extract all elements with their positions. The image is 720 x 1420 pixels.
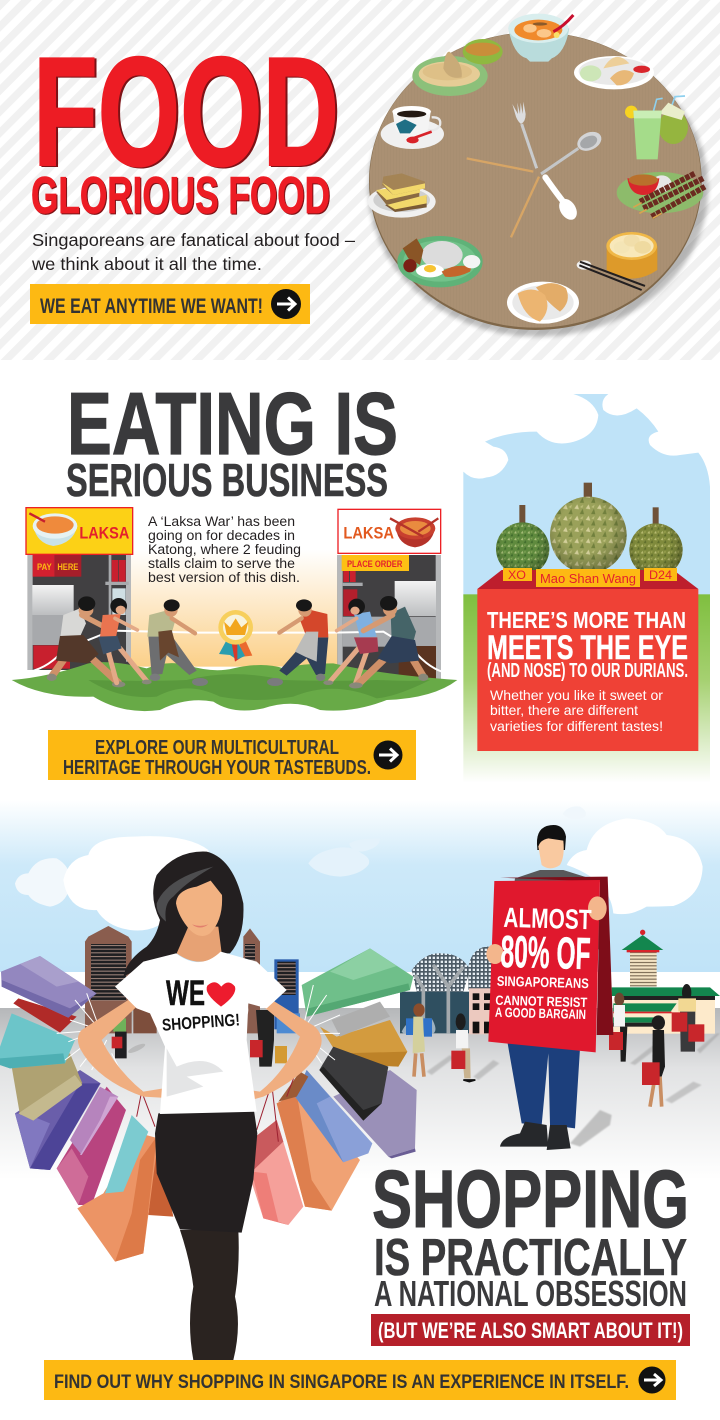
shopping sky (0, 800, 720, 972)
pay here sign: PAY (37, 562, 52, 572)
brown tower (85, 926, 260, 1033)
puller: woman in blue (323, 599, 378, 688)
neck (177, 927, 222, 962)
shopper in cream dress (413, 1003, 425, 1077)
food clock (368, 14, 708, 337)
right laksa sign (338, 509, 441, 553)
clock hand: chopstick one (467, 158, 533, 172)
shopping ground (0, 1008, 720, 1180)
left laksa sign (26, 508, 133, 554)
durian body text: Whether you like it sweet or (490, 687, 663, 703)
heading: serious business: SERIOUS BUSINESS (66, 454, 388, 506)
board text: 80% OF (500, 926, 591, 979)
intro text (31, 230, 355, 274)
bag: orange left (77, 1133, 158, 1262)
bag: purple (15, 1070, 101, 1170)
skirt (155, 1111, 257, 1233)
clock hand: ceramic spoon (545, 177, 581, 223)
red box (477, 589, 698, 751)
durian heading (487, 607, 688, 682)
shopper with dark trousers (609, 993, 627, 1062)
durian sky with cloud cut-outs (463, 394, 710, 597)
shirt text: shopping: SHOPPING! (161, 1010, 240, 1035)
puller: man in grey apron (267, 599, 328, 686)
call to action: shopping experience: FIND OUT WHY SHOPPING IN SINGAPORE IS AN EXPERIENCE IN ITSELF. (54, 1372, 629, 1393)
man shadow (570, 1110, 612, 1147)
red box top (477, 570, 698, 589)
call to action: eat anytime: WE EAT ANYTIME WE WANT! (40, 295, 263, 318)
arm right (213, 997, 322, 1107)
puller: man in teal singlet (349, 596, 428, 688)
lips (192, 924, 208, 927)
blue tower (274, 959, 300, 1033)
call to action: multicultural heritage (48, 730, 416, 780)
man with sandwich board (486, 825, 613, 1150)
heading: eating is: EATING IS (67, 374, 398, 473)
bag: dark orange tip (278, 1072, 308, 1102)
jeans (507, 1042, 580, 1128)
laksa war text: best version of this dish. (148, 570, 300, 585)
food: plate with dumplings (574, 56, 654, 89)
puller: man in white singlet (47, 596, 125, 687)
board text: A GOOD BARGAIN (495, 1005, 586, 1022)
shopper in black suit (250, 1010, 287, 1067)
skyline left (85, 926, 300, 1067)
hand right (588, 896, 607, 920)
shirt print: we love shopping (152, 985, 248, 1035)
bag strings (57, 985, 340, 1080)
shirt (115, 952, 287, 1114)
title: food: FOOD (33, 25, 339, 198)
shoe right (547, 1125, 571, 1150)
durian body text (490, 687, 663, 734)
bag: orange behind skirt (148, 1133, 173, 1217)
hair back (123, 852, 243, 977)
bag: gold (320, 1020, 407, 1067)
durian labels: XO (508, 568, 526, 582)
intro text: we think about it all the time. (31, 254, 262, 274)
food: roti prata (412, 39, 503, 96)
bag: grey (332, 1002, 390, 1037)
clock hand: chopstick two (511, 177, 539, 237)
laksa war text: stalls claim to serve the (148, 556, 295, 571)
grass gradient (463, 594, 710, 783)
pay here sign: HERE (57, 562, 78, 572)
grass ground (12, 662, 457, 711)
call to action: multicultural heritage: EXPLORE OUR MULTICULTURAL (95, 737, 339, 759)
food: laksa bowl (508, 14, 573, 62)
face (176, 881, 222, 936)
face (538, 838, 564, 868)
clock hand: fork (512, 102, 537, 168)
laksa war text: A ‘Laksa War’ has been (148, 514, 295, 529)
back board (500, 877, 613, 1035)
skyline right (400, 930, 720, 1147)
shopper in black dress (642, 1015, 665, 1107)
hand left (486, 944, 504, 964)
board text: SINGAPOREANS (497, 973, 589, 991)
tug of war rope (30, 631, 448, 673)
shoes (500, 1122, 548, 1147)
shopper in green (112, 1018, 146, 1058)
food: curry puffs (507, 282, 579, 324)
clock face (370, 32, 701, 328)
durian labels: Mao Shan Wang (540, 571, 636, 586)
chinatown building (612, 930, 720, 1034)
food: satay plate (617, 172, 705, 218)
hair highlight (157, 867, 213, 922)
heart (207, 982, 235, 1007)
bag: teal tall (105, 1115, 148, 1193)
pay here sign (33, 555, 81, 577)
shopper in white top (451, 1013, 475, 1082)
title: glorious food (31, 167, 331, 226)
durian XO (496, 505, 549, 576)
shopping bags (0, 948, 417, 1262)
shopper in yellow top (672, 984, 704, 1052)
left laksa sign: LAKSA (79, 523, 129, 542)
title: food (33, 25, 341, 199)
board text: CANNOT RESIST (495, 993, 588, 1010)
shirt text: we: WE (166, 974, 205, 1013)
handle strings (103, 1057, 297, 1142)
food: kopi cup (381, 106, 444, 149)
food: kaya toast (368, 173, 436, 218)
bag: black (319, 1047, 388, 1121)
horizon band (0, 972, 720, 1008)
call to action: shopping experience (44, 1360, 676, 1400)
food: nasi lemak (397, 236, 483, 287)
laksa war text (148, 514, 301, 585)
durian labels (503, 568, 677, 587)
title: food: FOOD (35, 26, 341, 199)
bag: green box (302, 948, 413, 1017)
clock hand: spoon (541, 128, 604, 174)
food: dim sum basket (577, 232, 657, 290)
call to action: multicultural heritage: HERITAGE THROUGH YOUR TASTEBUDS. (63, 757, 371, 779)
right clouds (563, 806, 703, 914)
board text: ALMOST (503, 902, 592, 935)
arm left (78, 997, 188, 1098)
sunset glow (128, 550, 342, 667)
durian panel (463, 394, 710, 783)
place order sign: PLACE ORDER (347, 559, 403, 569)
durian Mao Shan Wang (550, 483, 627, 573)
woman with shopping bags (78, 852, 322, 1360)
legs (180, 1230, 239, 1360)
supertrees (400, 953, 470, 1037)
call to action: eat anytime (30, 284, 310, 324)
title: glorious food: GLORIOUS FOOD (31, 167, 330, 225)
laksa war scene (12, 508, 457, 711)
title: glorious food: GLORIOUS FOOD (32, 168, 331, 226)
puller: woman in orange (98, 598, 152, 684)
striped header background (0, 0, 720, 360)
bag: khaki (12, 1053, 82, 1121)
ground shadow shoppers (427, 1033, 720, 1103)
board text (495, 902, 592, 1022)
right stall (337, 555, 441, 680)
bag: orange right (277, 1093, 360, 1211)
durian body text: bitter, there are different (490, 702, 638, 718)
bag: light purple (70, 1087, 118, 1155)
sweater (507, 870, 610, 952)
laksa war text: going on for decades in (148, 528, 295, 543)
bag: dark red (13, 998, 77, 1033)
bag: blue (295, 1070, 372, 1162)
durian labels: D24 (649, 568, 672, 582)
bag: lavender box (1, 956, 97, 1018)
shirt shading (167, 1048, 223, 1097)
hair (537, 825, 566, 850)
dome building (468, 947, 495, 1034)
right laksa sign: LAKSA (343, 523, 394, 542)
bag: pink (241, 1120, 303, 1225)
left clouds (15, 836, 380, 930)
durian D24 (629, 507, 683, 577)
intro text: Singaporeans are fanatical about food – (32, 230, 355, 250)
bag: teal wide (0, 1013, 75, 1068)
puller: man in brown apron (147, 599, 208, 686)
bag: lavender long (333, 1070, 417, 1158)
left stall (28, 555, 131, 670)
board front (488, 880, 600, 1052)
laksa war text: Katong, where 2 feuding (148, 542, 301, 557)
food: drink and coconut (625, 96, 688, 159)
bag: magenta (57, 1087, 126, 1205)
prize medal (218, 610, 253, 662)
durian body text: varieties for different tastes! (490, 718, 663, 734)
